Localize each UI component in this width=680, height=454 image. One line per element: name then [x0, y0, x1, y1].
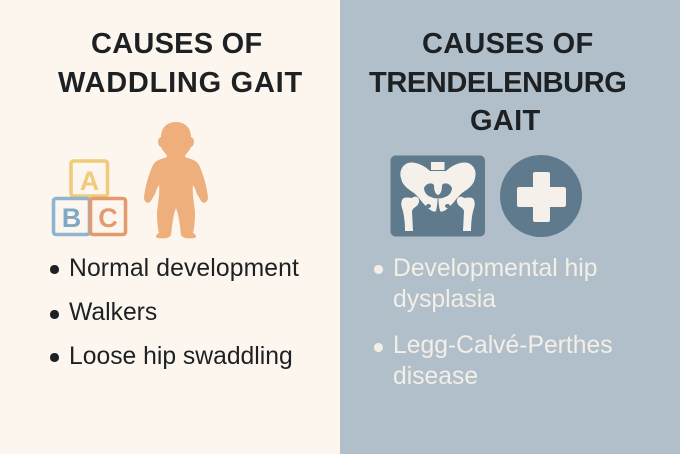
list: trendelenburg causes: [374, 255, 613, 390]
icon: alphabet blocks: [52, 159, 128, 236]
heading: causes of trendelenburg gait: TRENDELENBURG: [369, 67, 626, 99]
bullet item: walkers: Walkers: [69, 299, 157, 326]
bullet item: normal development: Normal development: [69, 255, 299, 282]
heading: causes of trendelenburg gait: GAIT: [470, 105, 540, 137]
heading: causes of waddling gait: [58, 28, 303, 99]
icon: alphabet blocks: A: [80, 166, 99, 196]
panel: waddling gait: [0, 0, 340, 454]
heading: causes of waddling gait: CAUSES OF: [91, 28, 262, 60]
icon: alphabet blocks: C: [98, 203, 118, 233]
icon: medical cross: [500, 155, 582, 237]
heading: causes of waddling gait: WADDLING GAIT: [58, 67, 303, 99]
list: waddling causes: [50, 255, 299, 370]
bullet item: developmental hip dysplasia: dysplasia: [393, 286, 496, 313]
bullet item: loose hip swaddling: Loose hip swaddling: [69, 343, 293, 370]
panel: trendelenburg gait: [340, 0, 680, 454]
icon: pelvis x-ray: [390, 156, 485, 236]
bullet item: legg-calve-perthes disease: Legg-Calvé-Perthes: [393, 332, 613, 359]
bullet item: legg-calve-perthes disease: disease: [393, 363, 478, 390]
heading: causes of trendelenburg gait: CAUSES OF: [422, 28, 593, 60]
bullet item: legg-calve-perthes disease: [374, 332, 613, 390]
bullet item: developmental hip dysplasia: [374, 255, 597, 313]
heading: causes of trendelenburg gait: [369, 28, 626, 137]
bullet item: developmental hip dysplasia: Developmental hip: [393, 255, 597, 282]
icon: baby: [144, 122, 208, 238]
icon: alphabet blocks: B: [62, 203, 81, 233]
